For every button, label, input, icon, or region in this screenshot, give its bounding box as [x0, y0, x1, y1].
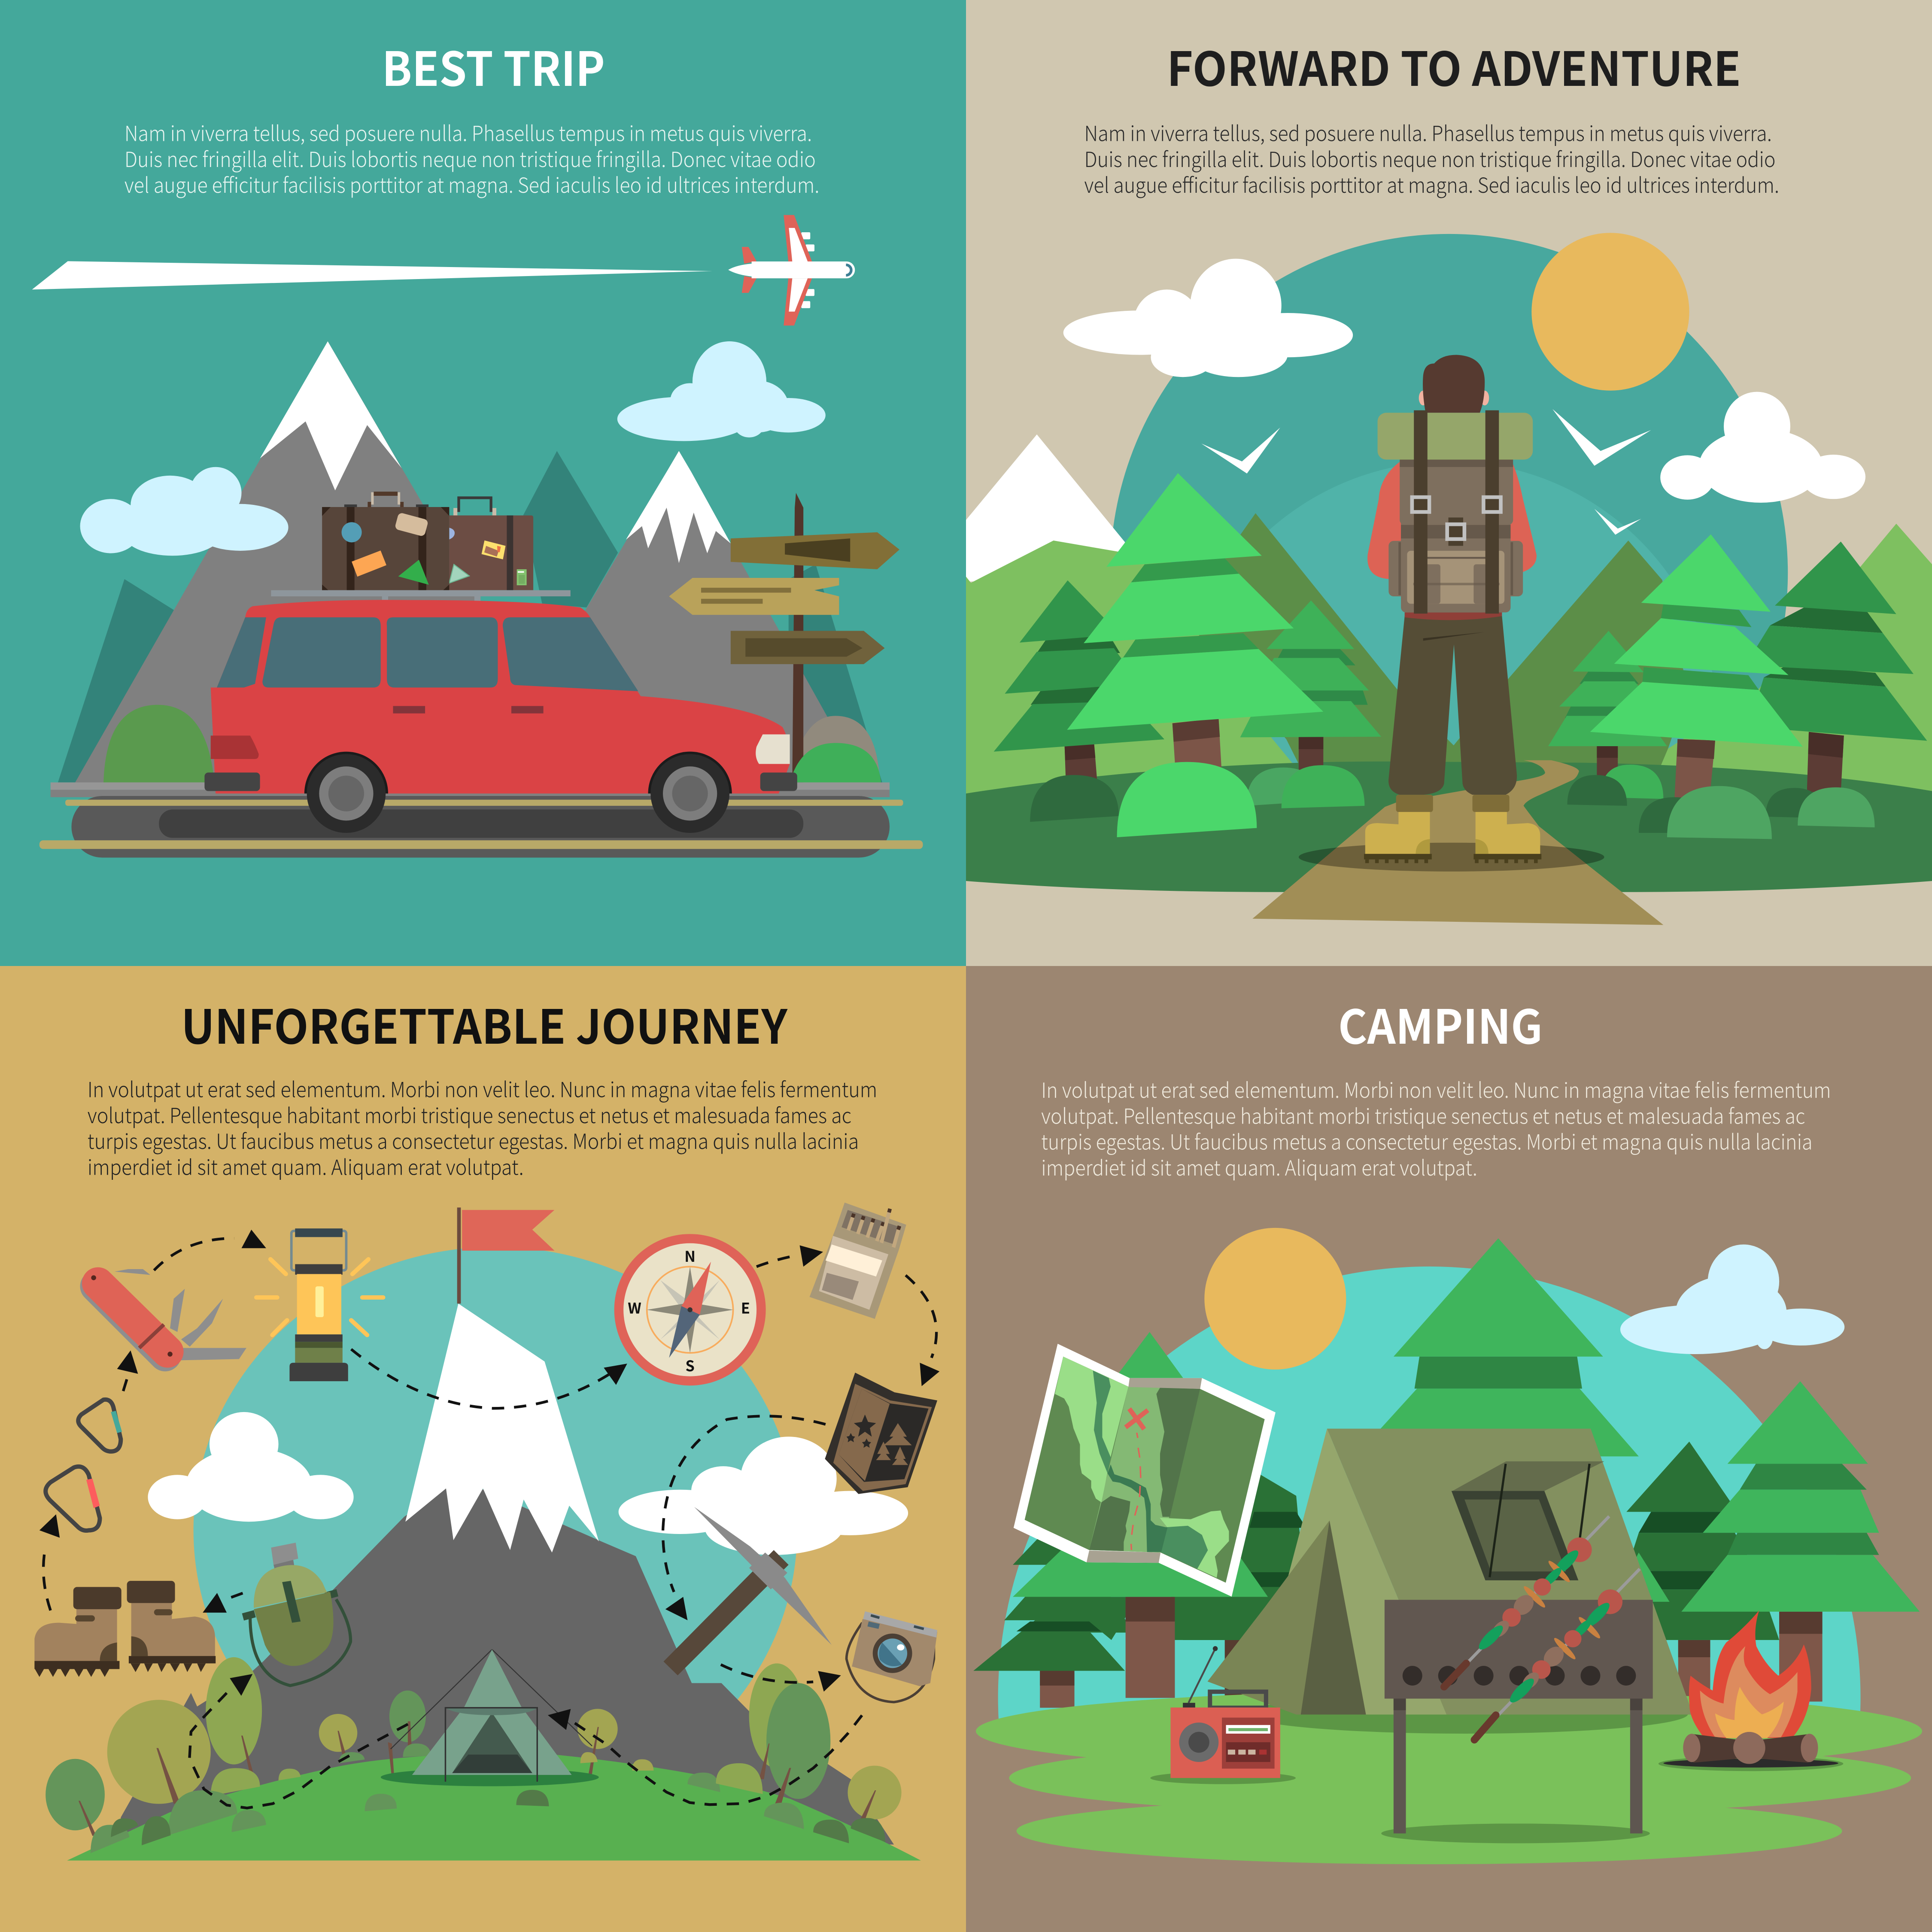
campfire [1659, 1610, 1843, 1771]
trousers [1388, 616, 1517, 795]
bedroll [1378, 413, 1533, 459]
compass [614, 1234, 766, 1385]
text block: journey: imperdiet id sit amet quam. Aliquam erat volutpat. [88, 1151, 524, 1181]
sky circle [194, 1247, 797, 1814]
rucksack [1400, 459, 1513, 612]
ground [966, 762, 1932, 892]
cloud [1620, 1245, 1844, 1354]
hill [67, 1755, 921, 1861]
text block: best trip [125, 125, 818, 198]
tree: dark centre left [1170, 1460, 1306, 1714]
title: unforgettable journey: UNFORGETTABLE JOURNEY [181, 990, 788, 1057]
sun [1531, 233, 1689, 391]
compass: N [684, 1245, 696, 1266]
text block: journey: In volutpat ut erat sed elementum. Morbi non velit leo. Nunc in magna vitae felis fermentum [88, 1073, 877, 1104]
lantern [256, 1228, 383, 1381]
barbecue grill [1381, 1600, 1653, 1843]
red car [204, 590, 797, 833]
sun [1204, 1228, 1346, 1370]
panel: forward to adventure [966, 0, 1932, 966]
skewer: lower [1474, 1569, 1640, 1740]
boots [1364, 795, 1541, 861]
title: forward to adventure: FORWARD TO ADVENTURE [1167, 32, 1741, 100]
cloud: right [1660, 392, 1865, 503]
wheel: rear [304, 752, 388, 833]
text block: forward to adventure: vel augue efficitur facilisis porttitor at magna. Sed iaculis leo id ultrices interdum. [1084, 169, 1779, 199]
pickaxe [663, 1507, 832, 1675]
tree: bright far back right [1614, 1552, 1670, 1602]
text block: best trip: Duis nec fringilla elit. Duis lobortis neque non tristique fringilla. Donec vitae odio [125, 143, 816, 173]
boot: right [127, 1581, 216, 1672]
matchbox [810, 1203, 906, 1319]
trail [1252, 760, 1663, 925]
text block: forward to adventure: Duis nec fringilla elit. Duis lobortis neque non tristique fringilla. Donec vitae odio [1084, 143, 1776, 173]
tree: big left [1067, 473, 1323, 772]
tree: dark right [1589, 1442, 1779, 1732]
hiker [1364, 355, 1541, 861]
mountains [58, 341, 882, 789]
tree trunks [79, 1721, 876, 1836]
carabiners [46, 1400, 122, 1531]
airplane with trail [32, 215, 855, 325]
panel: best trip [0, 0, 966, 966]
luggage [322, 492, 533, 590]
text block: journey [88, 1073, 877, 1181]
sky circle [1110, 234, 1788, 789]
bushes [1030, 762, 1875, 839]
map [1005, 1331, 1276, 1597]
boots [34, 1581, 216, 1677]
suitcase: back [449, 498, 533, 590]
snowy peak [966, 434, 1125, 582]
tree: dark far left [973, 1516, 1133, 1708]
skewer: upper [1444, 1516, 1609, 1687]
hills [966, 513, 1932, 795]
pocket knife [91, 1269, 246, 1360]
tent [1207, 1429, 1693, 1734]
camera [847, 1611, 937, 1702]
tree: big back [1355, 1238, 1639, 1456]
compass: W [628, 1296, 641, 1318]
radio [1150, 1646, 1296, 1784]
tree: left light [1013, 1332, 1268, 1698]
title: camping: CAMPING [1338, 990, 1543, 1057]
text block: journey: turpis egestas. Ut faucibus metus a consectetur egestas. Morbi et magna quis nulla lacinia [88, 1125, 859, 1155]
boot: left [34, 1587, 122, 1677]
cloud: right [619, 1437, 908, 1555]
text block: journey: volutpat. Pellentesque habitant morbi tristique senectus et netus et malesuada fames ac [88, 1099, 851, 1130]
text block: camping: volutpat. Pellentesque habitant morbi tristique senectus et netus et malesuada fames ac [1041, 1100, 1805, 1130]
cloud: left [148, 1412, 354, 1522]
compass: E [741, 1296, 750, 1318]
tree: left [994, 580, 1164, 782]
text block: camping: imperdiet id sit amet quam. Aliquam erat volutpat. [1041, 1151, 1477, 1182]
compass: S [685, 1354, 695, 1376]
panel: unforgettable journey [0, 966, 966, 1932]
skewers [1444, 1516, 1640, 1740]
title: best trip: BEST TRIP [382, 32, 605, 100]
tree: big right [1590, 535, 1803, 799]
road [39, 782, 923, 857]
canteen [242, 1543, 351, 1686]
mountain [121, 1303, 894, 1844]
map patch [825, 1373, 937, 1494]
birds [1201, 409, 1651, 535]
cloud: top right [617, 341, 826, 441]
panel: camping [966, 966, 1932, 1932]
shadow under hiker [1299, 843, 1604, 872]
red shirt [1367, 459, 1537, 579]
tree: dark right [1745, 541, 1927, 792]
text block: best trip: Nam in viverra tellus, sed posuere nulla. Phasellus tempus in metus quis viverra. [125, 117, 812, 148]
hair and ears [1419, 355, 1489, 413]
side pockets [1388, 541, 1523, 596]
text block: forward to adventure [1084, 117, 1779, 199]
ground [976, 1691, 1922, 1864]
straps and buckles [1412, 410, 1501, 614]
cloud: left [80, 467, 289, 556]
text block: camping [1041, 1074, 1831, 1182]
route: dashed arrows [39, 1230, 939, 1808]
signpost [669, 493, 899, 782]
flag [457, 1207, 554, 1303]
tree canopies [46, 1657, 902, 1830]
text block: camping: In volutpat ut erat sed elementum. Morbi non velit leo. Nunc in magna vitae felis fermentum [1041, 1074, 1831, 1104]
wheel: front [648, 752, 732, 833]
sky circle [998, 1267, 1861, 1725]
tent window [1452, 1461, 1604, 1580]
text block: best trip: vel augue efficitur facilisis porttitor at magna. Sed iaculis leo id ultrices interdum. [125, 169, 819, 199]
tree: small centre [1240, 601, 1381, 772]
tree: front right [1681, 1381, 1920, 1701]
bushes [103, 705, 880, 782]
text block: forward to adventure: Nam in viverra tellus, sed posuere nulla. Phasellus tempus in metus quis viverra. [1084, 117, 1772, 148]
tree: small right [1548, 631, 1667, 776]
tent [381, 1649, 599, 1786]
suitcase: front [322, 492, 449, 590]
cloud: left [1063, 259, 1353, 377]
hill bushes [91, 1744, 885, 1853]
text block: camping: turpis egestas. Ut faucibus metus a consectetur egestas. Morbi et magna quis nulla lacinia [1041, 1126, 1813, 1156]
